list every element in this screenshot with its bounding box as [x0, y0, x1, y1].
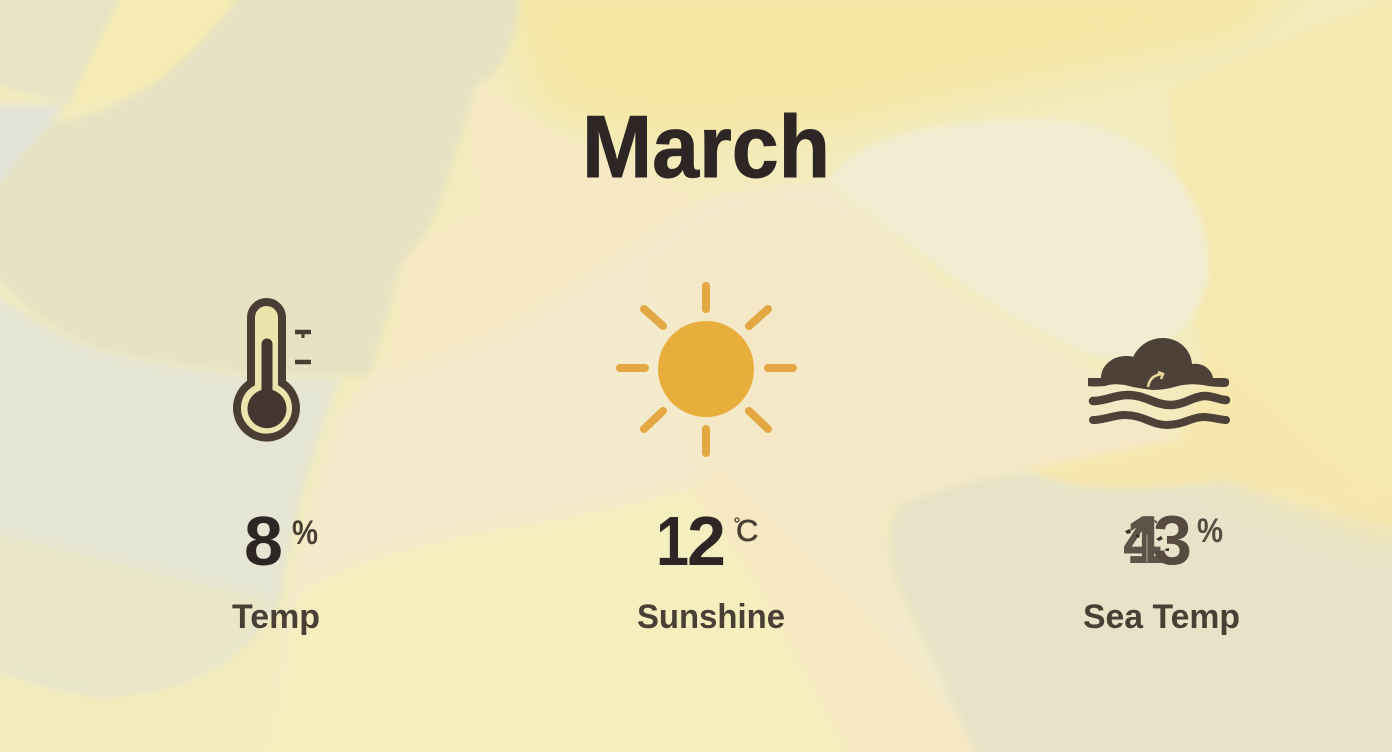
value: 13% with overlapping 4: 1 [1126, 502, 1164, 578]
value: 13% with overlapping 4: 3 [1153, 501, 1192, 579]
stat: sea temp [1083, 338, 1240, 636]
stat: temp [232, 302, 320, 636]
value: 8%: 8 [244, 502, 283, 580]
value: 8%: % [292, 514, 318, 552]
label: Sunshine: Sunshine [637, 598, 785, 636]
value: 13% with overlapping 4: % [1197, 512, 1223, 550]
label: Temp: Temp [232, 598, 320, 636]
icon: sun [620, 286, 793, 453]
value: 12 C: 1 [656, 502, 689, 580]
title: March [582, 97, 830, 196]
label: Sea Temp: Sea Temp [1083, 598, 1240, 636]
value: 12 C: C [736, 513, 758, 548]
stat: sunshine [620, 286, 793, 636]
value: 13% with overlapping 4: 4 [1123, 502, 1161, 578]
value: 12 C [656, 502, 758, 580]
value: 12 C: 2 [687, 502, 726, 580]
value: 8% [244, 502, 318, 580]
icon: cloud over waves [1088, 338, 1229, 425]
icon: thermometer [237, 302, 311, 438]
value: 13% with overlapping 4 [1123, 501, 1223, 579]
